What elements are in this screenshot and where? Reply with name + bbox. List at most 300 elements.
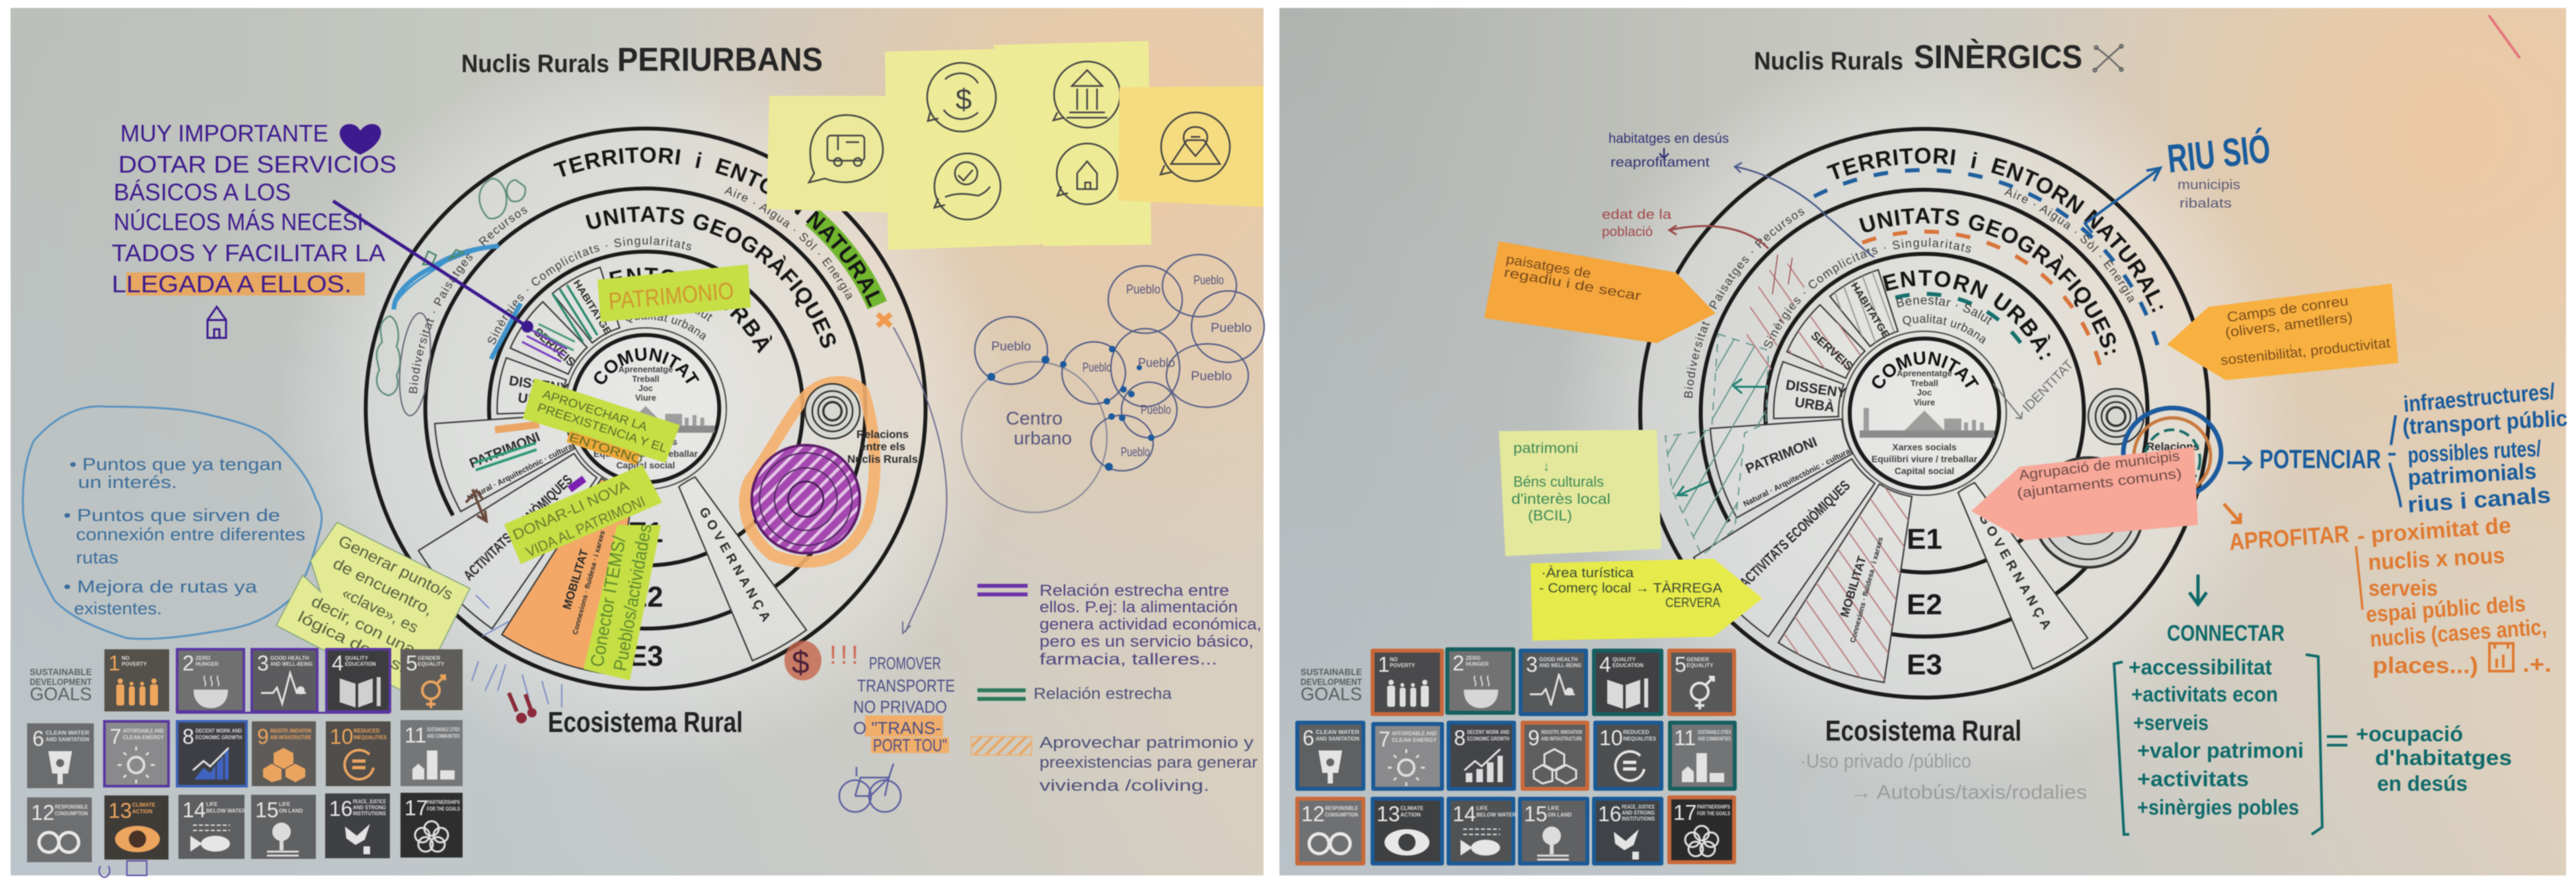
ring outlines	[1640, 129, 2209, 698]
network: Pueblos around Centro urbano: Pueblo	[1193, 274, 1224, 288]
handwritten note: basic services	[112, 120, 397, 298]
community details upper	[619, 364, 673, 403]
tile 9 industry: 9	[257, 725, 269, 748]
community details lower: Capital social	[617, 461, 675, 471]
sticky note: finance	[885, 49, 1042, 250]
tile 11 sustainable cities: 11	[1674, 726, 1696, 750]
title: Nuclis Rurals Periurbans: Nuclis Rurals	[461, 50, 609, 78]
tile 6 clean water: CLEAN WATER	[46, 730, 89, 736]
tile 10 reduced inequalities	[1595, 723, 1661, 789]
tile 12 responsible consumption: CONSUMPTION	[55, 811, 88, 817]
level labels E1 E2 E3: E1	[628, 517, 663, 549]
section: Aprofitar: APROFITAR	[2228, 520, 2350, 555]
network: Pueblos around Centro urbano: Pueblo	[1082, 361, 1112, 375]
tile 11 sustainable cities	[400, 720, 463, 786]
speech balloon: route points: connexión entre diferentes	[76, 524, 305, 544]
label: Relacions entre els Nuclis Rurals: entre els	[860, 440, 905, 453]
tile 3 good health	[252, 649, 317, 711]
tile 6 clean water	[1297, 723, 1363, 789]
legend: close relation purple: pero es un servicio básico,	[1040, 633, 1254, 651]
community details upper	[1897, 368, 1952, 407]
handwritten note: private/public use: ·Uso privado /público	[1800, 750, 1971, 772]
network: Pueblos around Centro urbano: Pueblo	[1126, 283, 1160, 297]
wedge: Mobilitat hatched red: MOBILITAT	[1838, 555, 1869, 619]
sticky note: Aprovechar la preexistencia: APROVECHAR LA	[541, 387, 649, 434]
speech balloon: route points: existentes.	[74, 598, 162, 618]
identity annotation	[1993, 358, 2076, 419]
section: Aprofitar: espai públic dels	[2365, 591, 2526, 627]
icon: heart	[340, 124, 381, 155]
relations circle small	[805, 384, 860, 438]
icon: bicycle	[839, 764, 901, 812]
sticky note: Generar puntos: de encuentro,	[330, 555, 436, 619]
tile 4 quality education: QUALITY	[345, 655, 369, 661]
community details lower: Xarxes socials	[614, 437, 677, 447]
sticky note: Generar puntos: decir, con una	[309, 592, 418, 659]
sticky arrow: tourism and local commerce: - Comerç local → TÀRREGA	[1539, 581, 1723, 596]
tile 10 reduced inequalities: INEQUALITIES	[354, 735, 387, 741]
heading: Ecosistema Rural: Ecosistema Rural	[548, 706, 743, 739]
tile 13 climate action	[104, 795, 169, 860]
tile 16 peace and justice	[325, 793, 390, 858]
heading: Comunitat: COMUNITAT	[593, 346, 701, 385]
tile 13 climate action: CLIMATE	[132, 802, 156, 808]
tile 17 partnerships: FOR THE GOALS	[1697, 811, 1731, 817]
tile 4 quality education	[1594, 651, 1661, 714]
tile 17 partnerships: FOR THE GOALS	[427, 806, 461, 812]
tile 14 life below water	[178, 795, 246, 859]
tile 9 industry	[252, 721, 316, 786]
SDG tiles grid	[27, 649, 463, 862]
handwritten note: promote public transport: O "TRANS-	[853, 718, 941, 738]
tile 16 peace and justice	[1594, 799, 1661, 864]
ring sublabel: urban quality: Qualitat urbana	[1902, 313, 1987, 345]
tile 13 climate action: ACTION	[1400, 812, 1421, 818]
sticky arrow: tourism and local commerce	[1531, 559, 1762, 641]
wedge: Disseny Urbà: URBÀ	[1794, 395, 1836, 415]
tile 2 zero hunger: 2	[1453, 651, 1464, 675]
tile 12 responsible consumption: 12	[31, 801, 55, 825]
panel background photo A	[10, 7, 1264, 876]
speech balloon: route points	[23, 407, 322, 639]
sticky note: Generar puntos: «clave», es	[339, 584, 421, 637]
community skyline	[582, 403, 714, 432]
sticky note: heritage: patrimoni	[1513, 440, 1578, 456]
section: Aprofitar: .+.	[2522, 652, 2552, 677]
level labels E1 E2 E3	[628, 517, 663, 672]
tile 7 clean energy: CLEAN ENERGY	[123, 735, 165, 741]
tile 2 zero hunger: HUNGER	[1466, 661, 1489, 667]
icon: dollar sign with exclamation marks: $	[792, 645, 810, 680]
section: Connectar: d'habitatges	[2375, 746, 2512, 770]
sticky arrow: grouping of municipalities: (ajuntaments comuns)	[2016, 466, 2183, 501]
wedge: Disseny Urbà	[1774, 362, 1847, 419]
sticky note: heritage: d'interès local	[1511, 491, 1610, 507]
community details upper: Treball	[1911, 378, 1938, 388]
level labels E1 E2 E3: E2	[628, 581, 663, 613]
SDG logo: GOALS	[30, 684, 92, 704]
tile 12 responsible consumption: RESPONSIBLE	[1325, 805, 1359, 811]
network: Pueblos around Centro urbano: Pueblo	[1191, 370, 1232, 383]
sticky note: heritage	[993, 41, 1151, 246]
tile 1 no poverty	[1373, 651, 1442, 714]
section: Connectar: +ocupació	[2356, 722, 2463, 746]
wedge: Activitats Econòmiques	[418, 454, 597, 629]
hand-drawn dashes under headings	[1814, 170, 2159, 366]
note: vacant housing: habitatges en desús	[1609, 132, 1729, 146]
section: Connectar: +valor patrimoni	[2137, 739, 2304, 762]
wedge: Governança	[679, 477, 806, 661]
tile 8 decent work: 8	[182, 725, 194, 748]
sticky arrow: crop fields: (olivers, ametllers)	[2224, 309, 2353, 341]
handwritten note: promote public transport: PORT TOU"	[873, 735, 947, 755]
section: Potenciar	[2228, 379, 2568, 518]
community details lower: Xarxes socials	[1892, 442, 1957, 452]
tile 5 gender equality: 5	[406, 651, 418, 675]
tile 14 life below water: 14	[182, 798, 206, 822]
title: Nuclis Rurals Periurbans	[461, 41, 823, 78]
ring sublabel: synergies: Sinèrgies · Complicitats · Singularitats	[1763, 237, 1972, 349]
icon: orange mark	[878, 314, 891, 326]
legend: close relation purple	[977, 582, 1262, 668]
SDG logo	[30, 666, 92, 704]
tile 6 clean water: 6	[32, 727, 44, 750]
tile 10 reduced inequalities: INEQUALITIES	[1623, 736, 1657, 742]
tile 10 reduced inequalities: 10	[1599, 726, 1623, 750]
wedge: Disseny Urbà: DISSENY	[508, 373, 570, 397]
relations circle large	[2033, 458, 2143, 567]
section: Potenciar: patrimonials	[2407, 459, 2537, 491]
tile 16 peace and justice: 16	[329, 797, 353, 821]
tile 12 responsible consumption	[27, 797, 92, 862]
tile 14 life below water: 14	[1453, 802, 1476, 826]
tile 13 climate action: 13	[108, 799, 132, 823]
section: Aprofitar: - proximitat de	[2357, 513, 2512, 549]
tile 5 gender equality	[400, 649, 463, 710]
tile 12 responsible consumption: RESPONSIBLE	[55, 804, 89, 810]
sticky note: Generar puntos: lógica detrás.	[295, 608, 409, 677]
tile 15 life on land	[251, 795, 316, 859]
wedge: Mobilitat filled orange: MOBILITAT	[560, 547, 591, 611]
level labels E1 E2 E3: E2	[1907, 588, 1942, 621]
tile 15 life on land: 15	[1524, 802, 1548, 826]
tile 17 partnerships: PARTNERSHIPS	[427, 799, 461, 805]
SDG logo: DEVELOPMENT	[1301, 676, 1362, 687]
tile 10 reduced inequalities: REDUCED	[354, 728, 380, 734]
tile 7 clean energy	[1373, 724, 1442, 789]
tile 8 decent work: ECONOMIC GROWTH	[1467, 736, 1509, 742]
section: Potenciar: possibles rutes/	[2407, 436, 2542, 468]
community details upper: Aprenentatge	[1897, 368, 1952, 378]
ring sublabel: elements: Aire · Aigua · Sòl · Energia	[2004, 188, 2135, 304]
tile 8 decent work: ECONOMIC GROWTH	[196, 735, 242, 741]
tile 4 quality education: QUALITY	[1612, 657, 1636, 663]
tile 1 no poverty: 1	[108, 651, 120, 675]
sticky arrow: crop fields	[2167, 284, 2398, 380]
sticky arrow: grouping of municipalities	[1971, 447, 2198, 540]
heading: Ecosistema Rural: Ecosistema Rural	[1825, 715, 2022, 747]
tile 9 industry	[1523, 723, 1587, 789]
wedge: Habitatge: HABITATGE	[1848, 280, 1891, 341]
tile 17 partnerships: PARTNERSHIPS	[1697, 804, 1731, 810]
legend: orange hatch heritage: Aprovechar patrimonio y	[1040, 734, 1254, 752]
identity annotation: IDENTITAT	[2020, 358, 2076, 415]
legend: close relation green: Relación estrecha	[1034, 685, 1172, 703]
tile 12 responsible consumption	[1297, 799, 1363, 864]
label: Relacions entre els Nuclis Rurals: Relacions	[856, 428, 909, 440]
network: Pueblos around Centro urbano: Pueblo	[1211, 321, 1252, 335]
sticky arrow: crop fields: ↓	[2288, 340, 2294, 353]
tile 11 sustainable cities: SUSTAINABLE CITIES	[427, 727, 460, 733]
handwritten note: basic services: TADOS Y FACILITAR LA	[112, 239, 385, 266]
SDG logo: SUSTAINABLE	[30, 666, 92, 677]
wedge: Governança: GOVERNANÇA	[696, 505, 775, 627]
SDG tiles grid	[1297, 649, 1735, 864]
wedge: Mobilitat hatched red	[1778, 484, 1912, 682]
sticky note: Patrimonio	[597, 264, 751, 322]
note: population age	[1602, 208, 1672, 239]
sticky note: Donar-li nova vida	[504, 465, 662, 564]
pointer line to Serveis	[333, 201, 533, 333]
tile 1 no poverty: POVERTY	[122, 661, 147, 667]
wedge: Serveis	[510, 302, 587, 374]
highlight: orange outline around relations circles	[745, 382, 875, 562]
ring sublabel: elements: Aire · Aigua · Sòl · Energia	[724, 186, 852, 301]
tile 3 good health: 3	[1526, 653, 1538, 676]
wedge: Habitatge	[1830, 270, 1898, 346]
tile 2 zero hunger: ZERO	[1466, 655, 1480, 661]
section: Potenciar: POTENCIAR	[2259, 445, 2381, 474]
tile 4 quality education: EDUCATION	[1612, 663, 1644, 668]
sticky arrow: crop fields: Camps de conreu	[2226, 293, 2349, 325]
tile 11 sustainable cities: AND COMMUNITIES	[427, 733, 460, 739]
handwritten note: promote public transport	[853, 653, 955, 755]
tile 15 life on land	[1520, 799, 1587, 864]
tile 16 peace and justice: 16	[1598, 802, 1622, 826]
label: Relacions entre els Nuclis Rurals	[847, 428, 918, 465]
sticky note: Generar puntos	[276, 522, 470, 698]
tile 11 sustainable cities: 11	[404, 723, 426, 747]
tile 13 climate action: 13	[1377, 802, 1400, 826]
title: Nuclis Rurals Sinèrgics: SINÈRGICS	[1914, 38, 2082, 75]
handwritten note: basic services: DOTAR DE SERVICIOS	[118, 151, 397, 178]
community details upper: Viure	[635, 393, 656, 403]
tile 9 industry: INDUSTRY, INNOVATION	[1541, 729, 1582, 735]
tile 4 quality education: 4	[1599, 653, 1611, 676]
tile 16 peace and justice: AND STRONG	[1622, 810, 1655, 816]
tile 16 peace and justice: AND STRONG	[353, 805, 386, 811]
tile 1 no poverty	[104, 649, 169, 711]
handwritten note: basic services: MUY IMPORTANTE	[120, 120, 328, 147]
section: Aprofitar	[2224, 504, 2552, 678]
community details upper: Viure	[1914, 397, 1935, 407]
sketch marks on left of wheel	[377, 179, 597, 707]
tile 5 gender equality: 5	[1675, 653, 1686, 676]
tile 7 clean energy: AFFORDABLE AND	[1392, 731, 1437, 737]
network: Pueblos around Centro urbano: urbano	[1014, 428, 1072, 448]
section: Connectar: +activitats econ	[2131, 682, 2278, 706]
sticky note: heritage	[1499, 430, 1661, 556]
handwritten note: private/public use	[1800, 750, 2087, 803]
sticky arrow: landscapes: regadiu i de secar	[1503, 265, 1642, 303]
tile 2 zero hunger: HUNGER	[196, 661, 219, 667]
sticky note: Patrimonio: PATRIMONIO	[607, 277, 735, 315]
tile 1 no poverty: POVERTY	[1390, 663, 1416, 668]
ring heading: Unitats Geogràfiques: UNITATS GEOGRÀFIQUES:	[1858, 208, 2117, 356]
sticky arrow: crop fields: sostenibilitat, productivitat	[2220, 335, 2391, 368]
relations circle small	[2088, 389, 2144, 444]
heading: Comunitat: COMUNITAT	[1872, 350, 1980, 389]
section: Potenciar: rius i canals	[2407, 483, 2552, 518]
tile 4 quality education: 4	[332, 651, 344, 675]
ring sublabel: wellbeing: Benestar · Salut	[1895, 296, 1992, 325]
tile 6 clean water: CLEAN WATER	[1316, 729, 1359, 735]
highlight: NATURAL	[812, 217, 878, 305]
legend: orange hatch heritage	[971, 734, 1258, 795]
tile 8 decent work: 8	[1454, 726, 1466, 750]
SDG logo: GOALS	[1301, 684, 1362, 704]
tile 4 quality education: EDUCATION	[345, 661, 376, 667]
sticky note: Donar-li nova vida: DONAR-LI NOVA	[510, 477, 632, 544]
wedge: Governança: GOVERNANÇA	[1976, 511, 2056, 635]
note: vacant housing	[1609, 132, 1729, 170]
tile 6 clean water	[27, 723, 94, 788]
tile 8 decent work	[177, 721, 246, 786]
legend: close relation purple: genera actividad económica,	[1040, 616, 1262, 633]
network: Pueblos around Centro urbano	[962, 255, 1264, 512]
arrow: population age	[1669, 225, 1792, 294]
tile 3 good health: AND WELL-BEING	[1539, 663, 1581, 668]
sticky arrow: landscapes	[1484, 241, 1716, 343]
tile 6 clean water: AND SANITATION	[1316, 736, 1359, 742]
legend: close relation purple: farmacia, talleres...	[1040, 651, 1217, 668]
tile 6 clean water: AND SANITATION	[46, 737, 89, 743]
section: Aprofitar: nuclis x nous	[2367, 543, 2505, 575]
ring sublabel: resources: Biodiversitat · Paisatges · Recursos	[1684, 208, 1805, 398]
legend: close relation purple: ellos. P.ej: la alimentación	[1040, 598, 1238, 616]
tile 9 industry: AND INFRASTRUCTURE	[270, 735, 311, 741]
section: Potenciar: infraestructures/	[2402, 379, 2556, 417]
tile 13 climate action: CLIMATE	[1400, 805, 1424, 811]
tile 2 zero hunger: ZERO	[196, 655, 210, 661]
level labels E1 E2 E3	[1907, 523, 1942, 681]
section: Aprofitar: nuclis (cases antic,	[2369, 614, 2548, 652]
icon: crossing arrows	[2094, 45, 2123, 71]
section: Connectar	[2114, 575, 2512, 834]
sticky note: place	[1118, 86, 1264, 207]
tile 17 partnerships: 17	[1673, 801, 1697, 825]
network: Pueblos around Centro urbano: Pueblo	[1121, 446, 1150, 460]
diagram: concentric rural ecosystem wheel	[363, 126, 928, 692]
tile 3 good health: 3	[257, 651, 269, 675]
community details lower: Equilibri viure / treballar	[593, 449, 699, 459]
tile 9 industry: AND INFRASTRUCTURE	[1541, 736, 1582, 742]
note: population age: edat de la	[1602, 208, 1672, 222]
icon: calendar	[2489, 643, 2513, 671]
tile 13 climate action: ACTION	[132, 809, 153, 815]
tile 2 zero hunger	[1447, 649, 1513, 713]
handwritten note: private/public use: → Autobús/taxis/rodalies	[1850, 782, 2087, 803]
diagram: concentric rural ecosystem wheel	[1638, 126, 2211, 700]
tile 7 clean energy	[104, 721, 169, 786]
tile 6 clean water: 6	[1303, 726, 1314, 750]
tile 10 reduced inequalities: REDUCED	[1623, 729, 1649, 735]
note: vacant housing: reaprofitament	[1610, 155, 1710, 170]
tile 9 industry: INDUSTRY, INNOVATION	[270, 728, 311, 734]
section: Connectar: CONNECTAR	[2167, 621, 2285, 646]
sticky note: Donar-li nova vida: VIDA AL PATRIMONI	[523, 493, 648, 561]
wedge: Mobilitat hatched red: Connexions · fluïdesa · i xarxes	[1849, 536, 1885, 643]
arrow and heading: Riu Sió: municipis	[2178, 178, 2240, 192]
sticky note: Aprovechar la preexistencia	[523, 378, 680, 467]
ring heading: Entorn Urbà: ENTORN URBÀ:	[1882, 270, 2051, 361]
arrow: housing note	[1735, 163, 1874, 257]
title: Nuclis Rurals Periurbans: PERIURBANS	[617, 41, 823, 78]
tile 14 life below water: BELOW WATER	[1476, 812, 1517, 818]
wedge: Habitatge	[552, 267, 620, 343]
tile 16 peace and justice: INSTITUTIONS	[1622, 816, 1655, 822]
tile 8 decent work	[1449, 723, 1514, 789]
community details upper: Joc	[638, 383, 653, 393]
tile 17 partnerships	[1669, 797, 1734, 862]
tile 14 life below water	[1449, 799, 1517, 864]
tile 17 partnerships: 17	[404, 796, 428, 820]
icon: dollar sign with exclamation marks	[784, 641, 858, 680]
wedge: Patrimoni: Natural · Arquitectònic · cultural	[466, 440, 576, 503]
network: Pueblos around Centro urbano: Centro	[1006, 408, 1063, 428]
SDG logo: DEVELOPMENT	[30, 676, 92, 687]
sticky note: finance: $	[956, 83, 971, 116]
wedge: Patrimoni: Natural · Arquitectònic · cultural	[1742, 446, 1854, 508]
ring heading: Territori i Entorn Natural: TERRITORI i ENTORN NATURAL	[552, 146, 880, 307]
tile 11 sustainable cities: SUSTAINABLE CITIES	[1698, 729, 1731, 735]
arrow: Natural to transport note	[893, 327, 947, 633]
panel background photo B	[1279, 0, 2576, 875]
tile 13 climate action	[1373, 799, 1442, 864]
wedge: Serveis: SERVEIS	[531, 325, 578, 369]
brackets	[2114, 655, 2322, 834]
ring sublabel: urban quality: Qualitat urbana	[625, 315, 706, 341]
tile 14 life below water: LIFE	[1476, 805, 1488, 811]
legend: close relation purple: Relación estrecha entre	[1040, 582, 1229, 600]
community details upper: Joc	[1917, 387, 1932, 397]
tile 5 gender equality: GENDER	[1686, 657, 1709, 663]
tile 14 life below water: LIFE	[206, 801, 218, 807]
handwritten note: basic services: LLEGADA A ELLOS.	[112, 270, 352, 298]
ring sublabel: synergies: Sinèrgies · Complicitats · Singularitats	[487, 235, 693, 345]
tile 7 clean energy: 7	[110, 725, 122, 748]
wedge: Serveis	[1787, 305, 1865, 378]
tile 15 life on land: ON LAND	[279, 808, 303, 814]
purple outline around goals 2-4 extension	[177, 649, 390, 713]
ring heading: Territori i Entorn Natural: TERRITORI i ENTORN NATURAL:	[1826, 147, 2164, 313]
section: Connectar: +accessibilitat	[2129, 655, 2272, 679]
tile 7 clean energy: CLEAN ENERGY	[1392, 737, 1437, 743]
arrows: green on hatching	[1677, 379, 1766, 495]
wedge: Habitatge: HABITATGE	[571, 278, 613, 337]
tile 15 life on land: LIFE	[1548, 805, 1560, 811]
tile 15 life on land: LIFE	[279, 801, 291, 807]
sticky arrow: tourism and local commerce: CERVERA	[1665, 596, 1721, 610]
sticky note: Conector: Pueblos/actividades	[609, 522, 656, 672]
title: Nuclis Rurals Sinèrgics: Nuclis Rurals	[1754, 48, 1903, 75]
ring sublabel: wellbeing: Benestar · Salut	[695, 311, 712, 322]
icon: dollar sign with exclamation marks: !!!	[829, 641, 858, 670]
hatching on territory band	[1665, 258, 1811, 555]
ring sublabel: resources: Biodiversitat · Paisatges · Recursos	[408, 206, 527, 394]
handwritten note: promote public transport: NO PRIVADO	[853, 697, 947, 717]
wedge: Disseny Urbà	[497, 358, 570, 414]
